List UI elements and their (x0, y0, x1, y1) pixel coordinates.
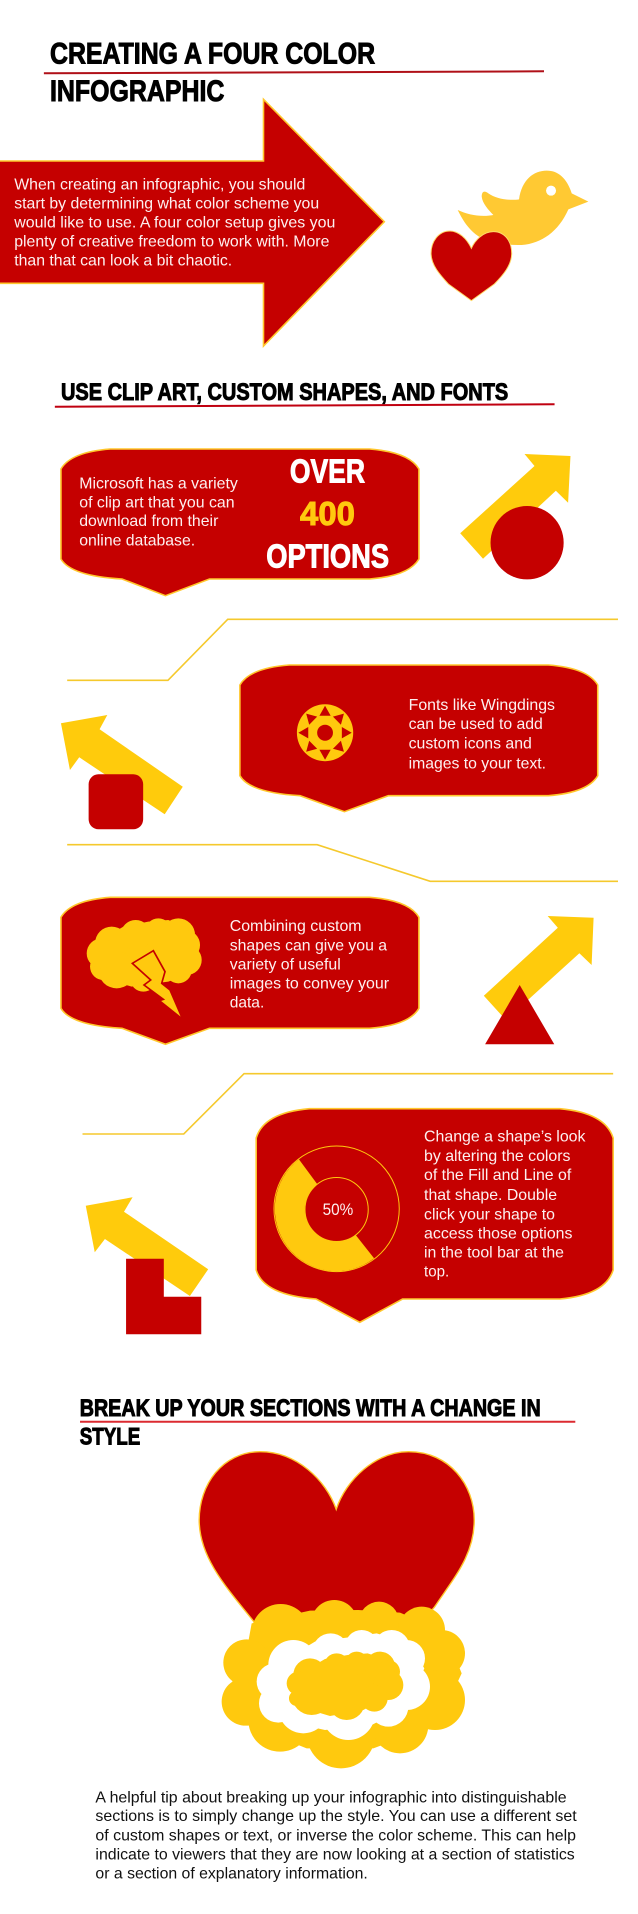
icon: arrow and L shape (86, 1197, 208, 1334)
stat: over 400 options: 400 (300, 495, 355, 532)
custom shapes text: images to convey your (230, 975, 390, 992)
outer cloud (222, 1600, 465, 1768)
icon: arrow and triangle (484, 916, 594, 1044)
stat: over 400 options: OPTIONS (266, 537, 389, 574)
title (44, 37, 544, 108)
stat: over 400 options (266, 453, 389, 574)
icon: layered cloud (222, 1600, 465, 1768)
chart: 50% doughnut (274, 1146, 399, 1272)
fill and line text: click your shape to (424, 1206, 555, 1223)
fill and line text: by altering the colors (424, 1148, 571, 1165)
custom shapes text (230, 918, 390, 1012)
white cloud (257, 1630, 430, 1740)
heading: change in style section (80, 1395, 575, 1450)
intro text: would like to use. A four color setup gives you (13, 214, 335, 231)
fill and line text: of the Fill and Line of (424, 1167, 572, 1184)
custom shapes text: Combining custom (230, 918, 362, 935)
heading: clip art section: USE CLIP ART, CUSTOM SHAPES, AND FONTS (61, 379, 508, 406)
intro text: than that can look a bit chaotic. (14, 253, 232, 270)
closing text: indicate to viewers that they are now looking at a section of statistics (95, 1846, 575, 1863)
closing text (95, 1790, 577, 1882)
fonts text: can be used to add (409, 716, 543, 733)
icon: arrow and circle (460, 454, 570, 579)
title: CREATING A FOUR COLOR (50, 37, 375, 71)
icon: arrow and rounded square (61, 715, 183, 829)
heading: change in style section: BREAK UP YOUR SECTIONS WITH A CHANGE IN (80, 1395, 541, 1422)
fill and line text: in the tool bar at the (424, 1244, 564, 1261)
fill and line text: Change a shape’s look (424, 1129, 586, 1146)
chart: 50% doughnut: 50% (323, 1200, 353, 1219)
panel: clip art callout (61, 449, 419, 596)
fill and line text: that shape. Double (424, 1187, 557, 1204)
closing text: sections is to simply change up the style. You can use a different set (95, 1808, 577, 1825)
heading: change in style section: STYLE (80, 1423, 140, 1450)
custom shapes text: variety of useful (230, 956, 341, 973)
fonts text (409, 697, 555, 772)
intro text: plenty of creative freedom to work with. More (14, 233, 330, 250)
closing text: of custom shapes or text, or inverse the color scheme. This can help (95, 1827, 576, 1845)
custom shapes text: data. (230, 995, 264, 1012)
fill and line text: top. (424, 1264, 449, 1281)
title: INFOGRAPHIC (50, 75, 224, 108)
panel: intro arrow (0, 99, 384, 346)
closing text: A helpful tip about breaking up your infographic into distinguishable (95, 1790, 567, 1807)
icon: bird (458, 171, 588, 245)
closing text: or a section of explanatory information. (95, 1865, 368, 1882)
clip art text: online database. (79, 532, 195, 549)
fonts text: images to your text. (409, 755, 546, 772)
clip art text: Microsoft has a variety (79, 475, 238, 492)
panel: fonts callout (240, 665, 598, 812)
clip art text: download from their (79, 513, 219, 530)
fill and line text (424, 1129, 586, 1281)
fonts text: Fonts like Wingdings (409, 697, 555, 714)
icon: large heart (199, 1452, 474, 1725)
panel: fill and line callout (256, 1109, 613, 1322)
icon: storm cloud with lightning (87, 918, 202, 1019)
fill and line text: access those options (424, 1225, 572, 1242)
fonts text: custom icons and (409, 735, 532, 752)
icon: wingdings sun (297, 704, 353, 761)
inner cloud (287, 1652, 403, 1720)
icon: small heart (431, 231, 512, 301)
intro text: start by determining what color scheme you (14, 195, 319, 212)
clip art text: of clip art that you can (79, 494, 235, 511)
clip art text (79, 475, 238, 549)
stat: over 400 options: OVER (290, 453, 365, 490)
custom shapes text: shapes can give you a (230, 937, 387, 954)
panel: custom shapes callout (61, 897, 419, 1044)
intro text (13, 176, 335, 270)
intro text: When creating an infographic, you should (14, 176, 305, 193)
